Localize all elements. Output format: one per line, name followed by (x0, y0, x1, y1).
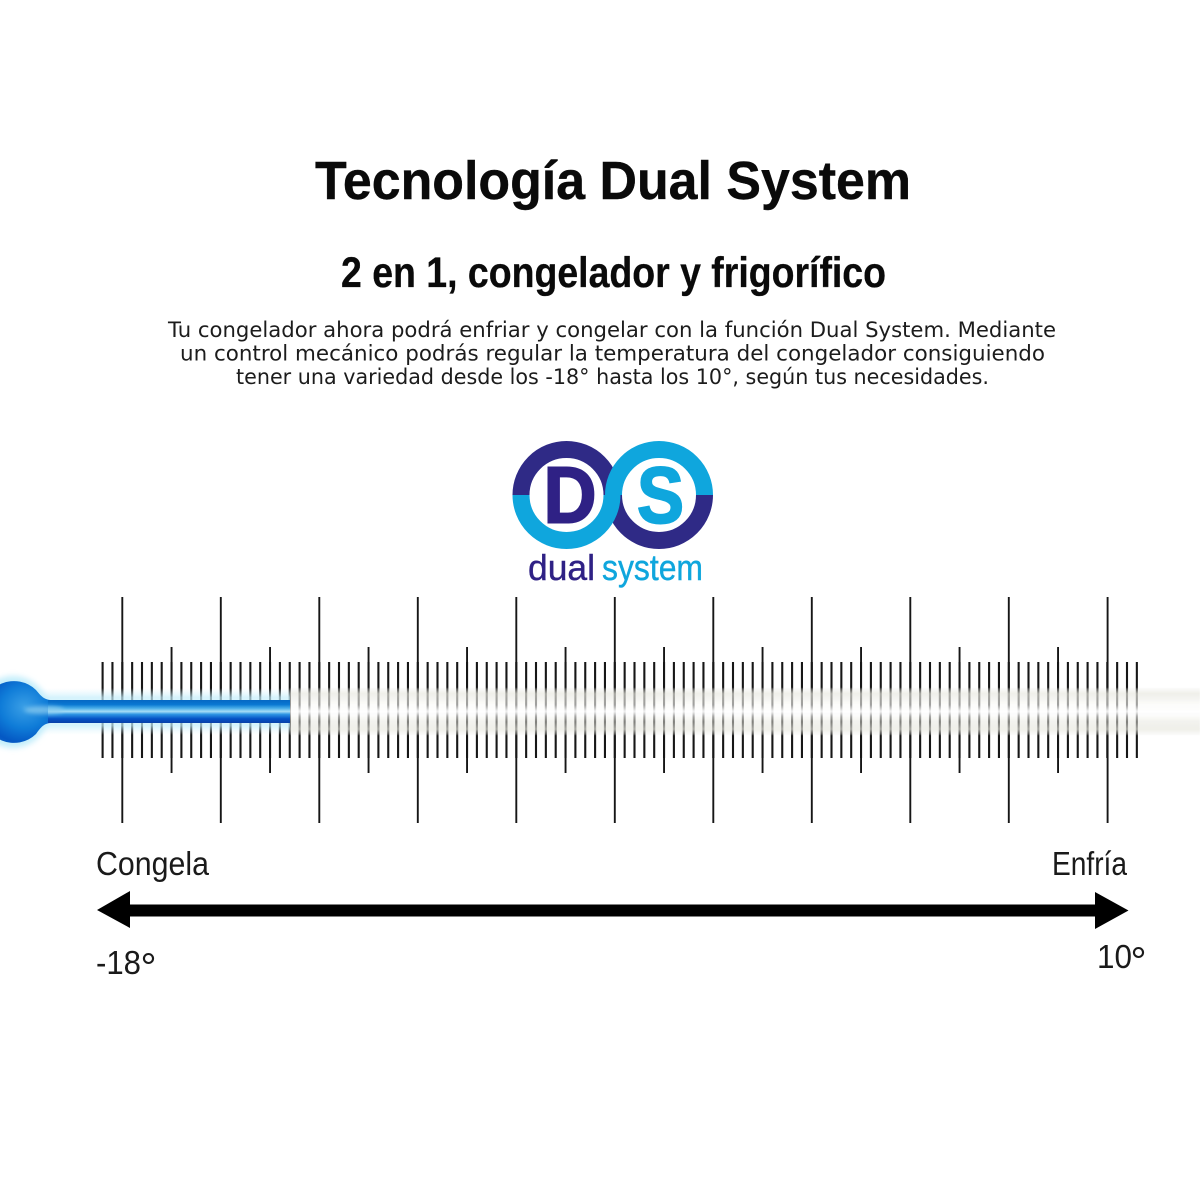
icon: dual system logo (521, 450, 704, 588)
bulb (0, 681, 52, 743)
label: Congela: Congela (96, 845, 210, 882)
label: 10 degrees: ° (1130, 940, 1146, 984)
bulb highlight (24, 706, 64, 714)
medium ticks (172, 647, 1058, 773)
logo letter D: D (544, 450, 596, 540)
label: 10 degrees (1097, 938, 1146, 984)
label: -18 degrees: ° (140, 946, 156, 990)
label: Enfría: Enfría (1052, 845, 1128, 882)
title: Tecnología Dual System (315, 151, 911, 211)
subtitle: 2 en 1, congelador y frigorífico (341, 249, 886, 297)
description text: Tu congelador ahora podrá enfriar y congelar con la función Dual System. Mediante (167, 318, 1056, 342)
tube glow (30, 688, 290, 735)
label: -18 degrees (96, 944, 156, 990)
description text: un control mecánico podrás regular la temperatura del congelador consiguiendo (180, 342, 1045, 366)
logo word dual: dual (528, 547, 595, 588)
thermometer scale ticks (103, 597, 1137, 823)
logo word system: system (602, 547, 703, 588)
bulb halo (0, 676, 49, 748)
blue mercury column (48, 700, 290, 723)
label: 10 degrees: 10 (1097, 938, 1132, 975)
logo rings (521, 450, 704, 540)
description text (167, 318, 1056, 389)
logo letter S: S (637, 450, 684, 540)
arrow: double-headed range (97, 891, 1128, 929)
empty tube (290, 688, 1200, 735)
short ticks (103, 662, 1137, 758)
thermometer (0, 676, 1200, 748)
long ticks (122, 597, 1108, 823)
description text: tener una variedad desde los -18° hasta los 10°, según tus necesidades. (236, 365, 989, 389)
label: -18 degrees: -18 (96, 944, 141, 981)
